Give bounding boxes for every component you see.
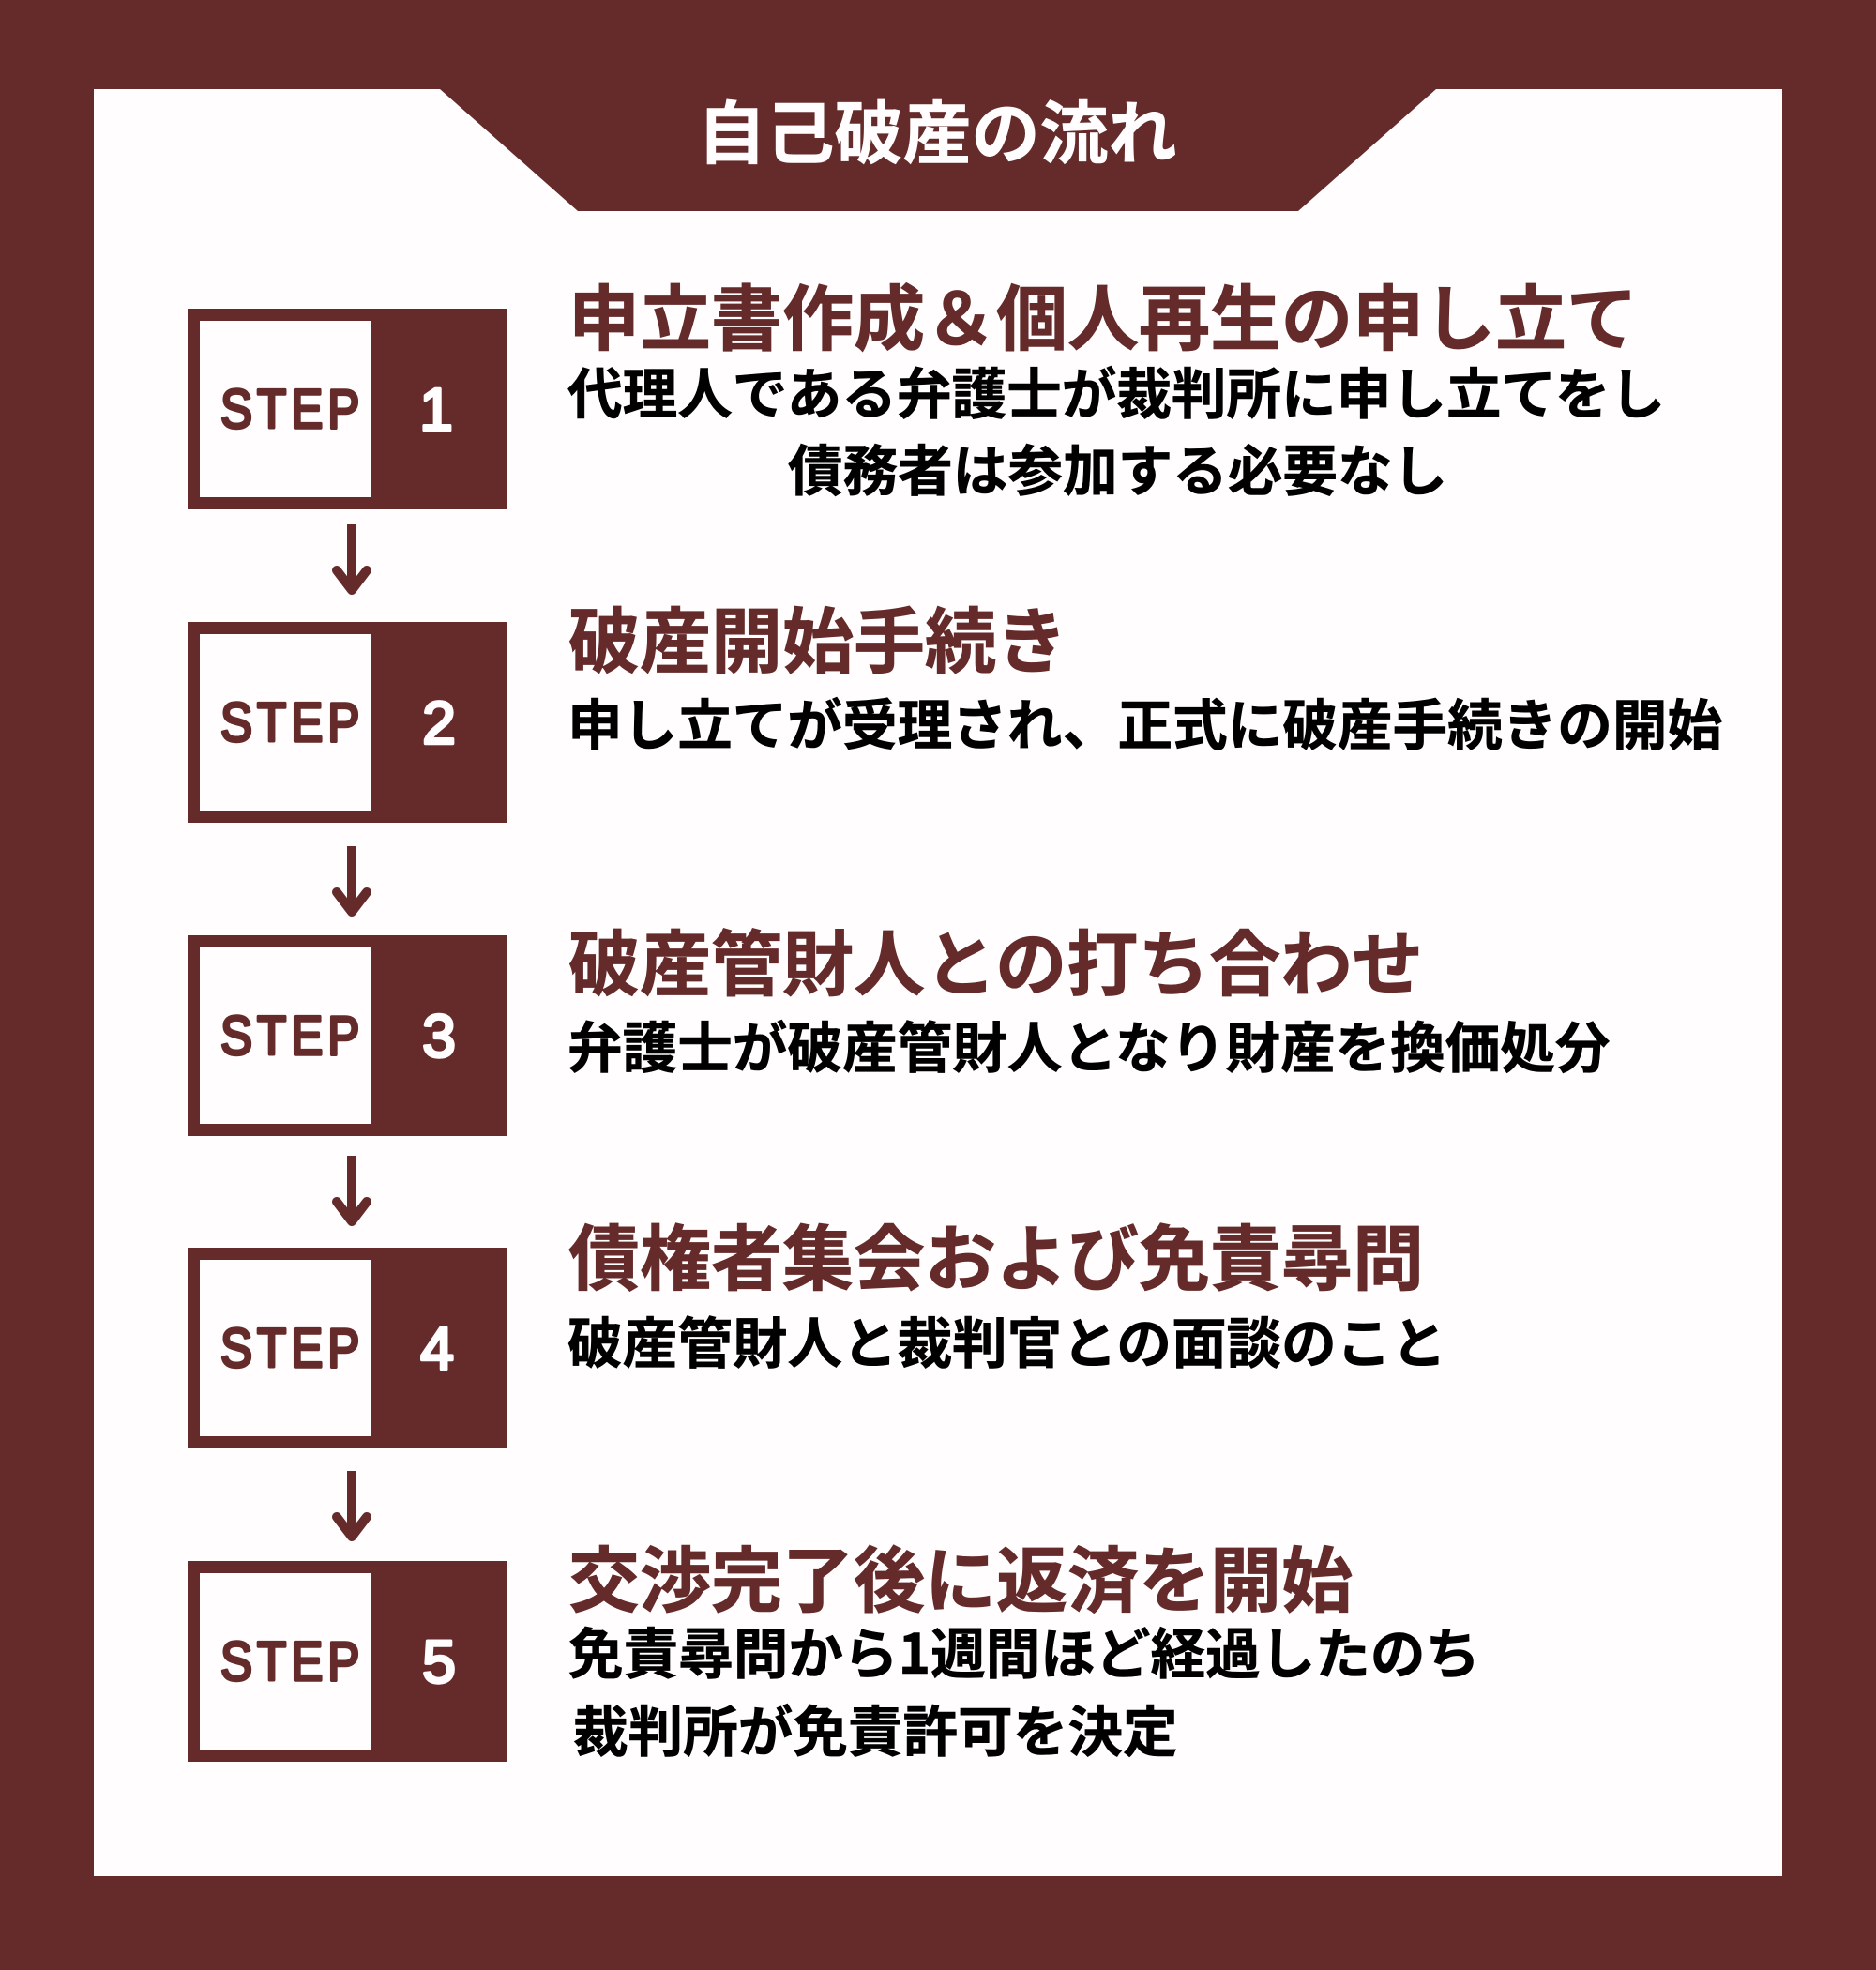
step 2 badge <box>188 622 507 823</box>
step 1 body line 1: 代理人である弁護士が裁判所に申し立てをし <box>567 350 1665 430</box>
step 1 badge <box>188 309 507 509</box>
step 5 label and number: 5 <box>422 1629 456 1696</box>
step 3 label box <box>200 947 371 1124</box>
step 5 body line 2: 裁判所が免責許可を決定 <box>573 1688 1178 1767</box>
step 4 label box <box>200 1260 371 1436</box>
step 2 label and number <box>220 689 456 756</box>
step 5 label and number <box>220 1629 456 1696</box>
title: 自己破産の流れ <box>698 79 1176 178</box>
step 3 label and number: 3 <box>422 1002 456 1069</box>
step 5 label box <box>200 1573 371 1750</box>
step 4 badge <box>188 1248 507 1448</box>
step 2 label and number: 2 <box>422 689 456 756</box>
step 1 label and number: STEP <box>220 379 364 440</box>
step 4 body: 破産管財人と裁判官との面談のこと <box>567 1299 1446 1379</box>
step 1 heading: 申立書作成＆個人再生の申し立て <box>568 262 1638 365</box>
title banner <box>440 89 1436 211</box>
step 3 label and number: STEP <box>220 1006 364 1067</box>
step 3 label and number <box>220 1002 456 1069</box>
step 5 heading: 交渉完了後に返済を開始 <box>568 1523 1353 1627</box>
step 2 body: 申し立てが受理され、正式に破産手続きの開始 <box>567 681 1722 761</box>
step 5 body line 1: 免責尋問から1週間ほど経過したのち <box>568 1610 1480 1690</box>
step 4 label and number: 4 <box>420 1315 454 1383</box>
step 3 body: 弁護士が破産管財人となり財産を換価処分 <box>567 1004 1611 1084</box>
step 5 badge <box>188 1561 507 1762</box>
step 1 label and number <box>220 375 453 443</box>
step 3 heading: 破産管財人との打ち合わせ <box>568 907 1423 1010</box>
arrow 1 to 2 <box>332 524 371 595</box>
step 4 label and number <box>220 1315 454 1383</box>
step 4 label and number: STEP <box>220 1318 364 1379</box>
step 1 label and number: 1 <box>419 375 453 443</box>
arrow 2 to 3 <box>332 846 371 917</box>
step 3 badge <box>188 935 507 1136</box>
step 1 body line 2: 債務者は参加する必要なし <box>788 427 1447 507</box>
step 1 label box <box>200 321 371 497</box>
arrow 4 to 5 <box>332 1471 371 1541</box>
step 2 label and number: STEP <box>220 692 364 753</box>
step 4 heading: 債権者集会および免責尋問 <box>568 1202 1424 1305</box>
arrow 3 to 4 <box>332 1156 371 1226</box>
step 2 heading: 破産開始手続き <box>568 584 1067 688</box>
step 5 label and number: STEP <box>220 1631 364 1692</box>
step 2 label box <box>200 634 371 811</box>
